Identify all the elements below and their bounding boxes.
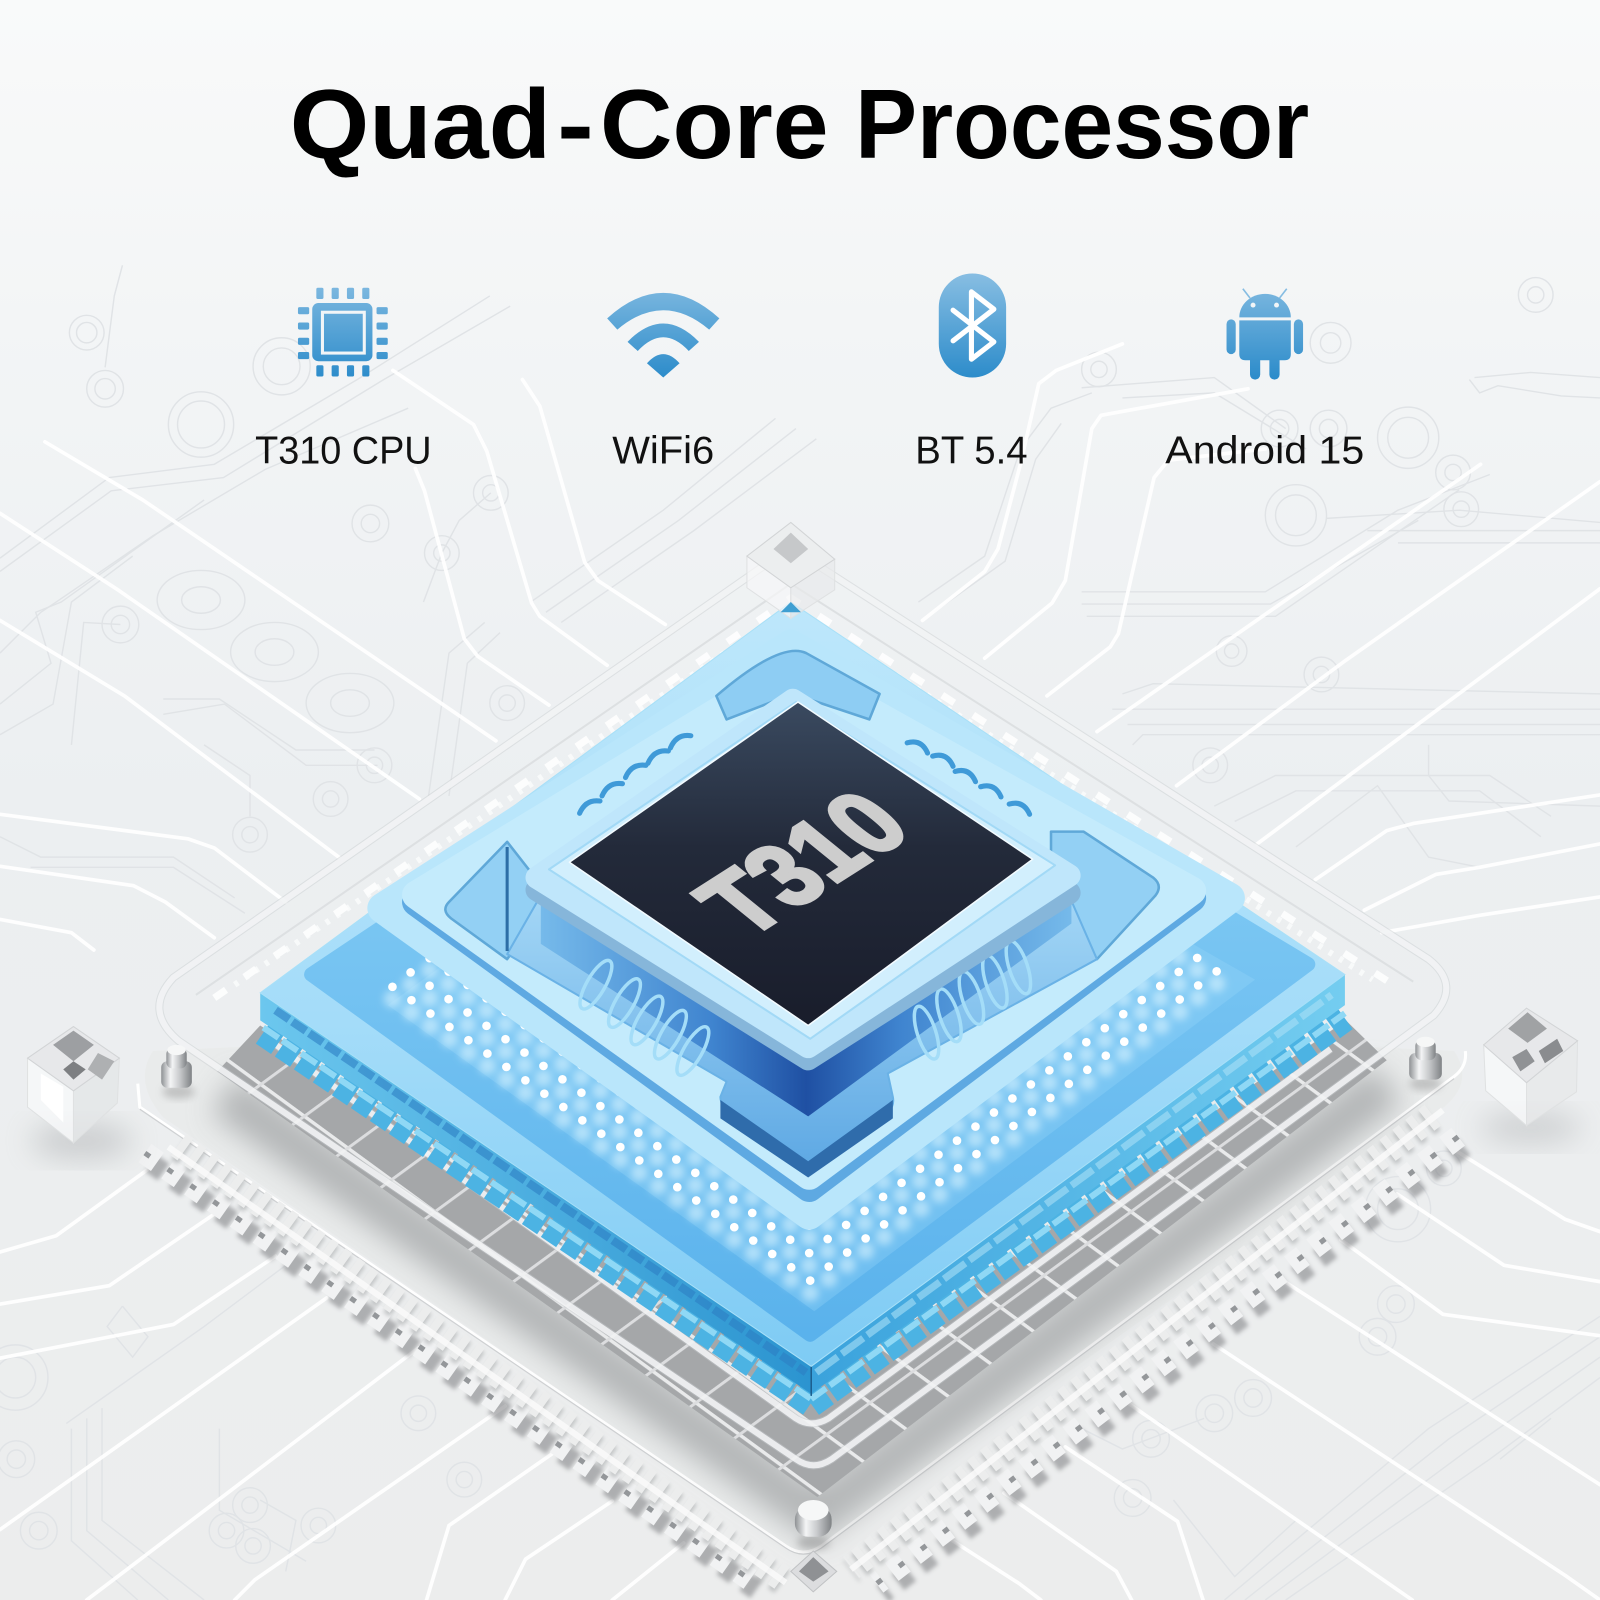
chip: black die — [569, 702, 1033, 1026]
crystal cube: top — [747, 522, 835, 618]
metal post: right — [1409, 1037, 1442, 1091]
icon: Android — [1227, 289, 1303, 380]
dark band below carrier — [541, 878, 1071, 1116]
chip: tier 2 — [416, 667, 1192, 1188]
title: Core — [600, 69, 829, 179]
clear glass frame — [159, 555, 1446, 1465]
label: T310 CPU: T310 CPU — [255, 429, 432, 472]
chip: blue inner panel — [311, 653, 1308, 1335]
chip: substrate side faces — [260, 974, 1345, 1396]
icon: WiFi — [607, 293, 719, 378]
tab: right — [1051, 832, 1159, 959]
label: BT 5.4: BT 5.4 — [915, 429, 1028, 472]
label: Android 15: Android 15 — [1165, 429, 1364, 472]
crystal cube: left — [28, 1027, 133, 1159]
title: Processor — [855, 69, 1309, 179]
lower clear base plate — [138, 1020, 1466, 1554]
comb and pins: lower right — [851, 1110, 1464, 1594]
icon: Bluetooth — [939, 273, 1006, 378]
crystal cube: right — [1480, 1008, 1582, 1144]
chip: tier 1 — [383, 645, 1230, 1214]
chip: glass top plate — [260, 602, 1345, 1366]
grey mesh under chip — [217, 1020, 1387, 1497]
chip label: T310: T310 — [674, 774, 932, 954]
rim: bottom tab — [720, 1100, 893, 1178]
comb and pins: lower left — [145, 1145, 786, 1590]
chip: tier 3 glass body and tabs — [445, 651, 1159, 1178]
chip: bond wire coils — [574, 938, 1036, 1079]
title: - — [557, 69, 594, 179]
tab: top — [716, 651, 880, 719]
tab: left — [445, 842, 551, 959]
chip: light die carrier — [537, 700, 1069, 1059]
title: Quad — [290, 69, 551, 179]
icon: CPU — [298, 288, 388, 377]
metal post: bottom — [795, 1500, 832, 1550]
label: WiFi6: WiFi6 — [612, 429, 714, 472]
plate shadow — [224, 1084, 1388, 1514]
circuit traces: white glowing — [0, 344, 1600, 1600]
body: lower — [507, 878, 1097, 1163]
metal post: left — [161, 1045, 195, 1099]
chip: solder dot rows — [373, 933, 1233, 1293]
chip: upper bond loops — [580, 735, 1030, 814]
chip: pad teeth — [263, 1013, 1345, 1404]
crystal cube: bottom — [791, 1551, 837, 1592]
